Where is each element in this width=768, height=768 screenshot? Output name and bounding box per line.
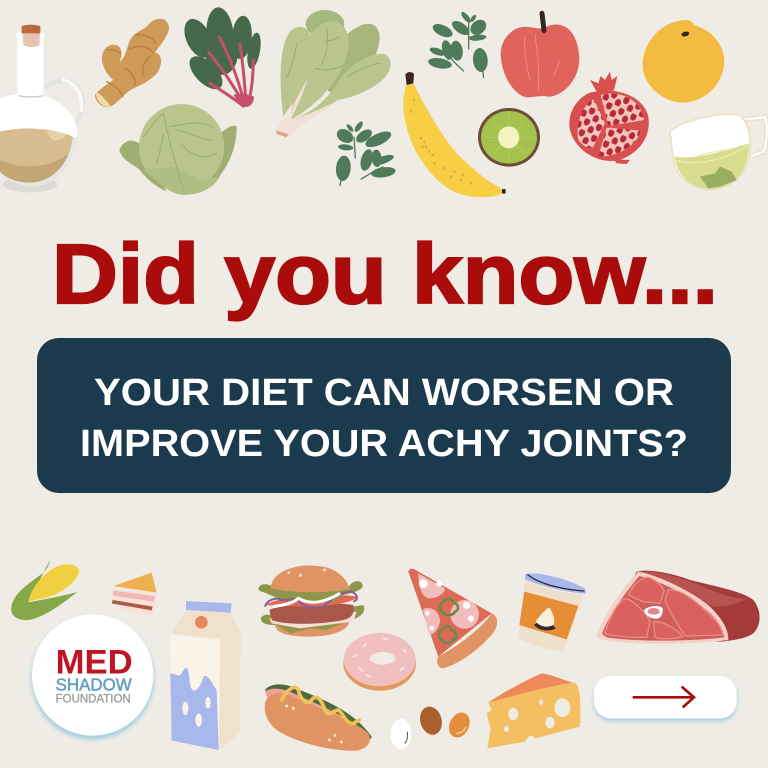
- icon: banana: [403, 72, 506, 197]
- icon: rainbow chard: [179, 6, 263, 107]
- icon: small green leaves: [334, 120, 396, 186]
- top row fruits, right: [403, 11, 767, 197]
- icon: red apple: [501, 13, 579, 97]
- logo text FOUNDATION: FOUNDATION: [56, 692, 131, 706]
- callout text: YOUR DIET CAN WORSEN OR: [94, 372, 674, 414]
- callout text: IMPROVE YOUR ACHY JOINTS?: [80, 423, 688, 465]
- icon: herbal tea cup: [670, 114, 767, 189]
- icon: herb sprig: [427, 11, 489, 78]
- icon: hot dog: [265, 684, 372, 751]
- icon: pizza slice: [408, 569, 497, 668]
- icon: coffee cup: [518, 573, 586, 652]
- logo badge: [31, 614, 154, 740]
- icon: orange: [643, 20, 724, 103]
- bottom row foods, right: [391, 569, 760, 749]
- callout panel: [37, 338, 731, 493]
- icon: ham steak: [597, 571, 760, 644]
- callout text: [80, 372, 688, 465]
- icon: cabbage: [119, 104, 237, 195]
- bottom row foods, left: [11, 560, 416, 751]
- icon: cheese wedge: [487, 673, 580, 748]
- title: Did you know...: [52, 227, 718, 321]
- icon: cake slice: [112, 573, 157, 615]
- icon: donut: [343, 633, 416, 691]
- icon: ginger root: [95, 19, 169, 107]
- icon: egg: [391, 719, 411, 749]
- icon: arrow: [633, 687, 694, 707]
- next arrow button: [594, 676, 737, 721]
- icon: burger: [258, 565, 364, 637]
- icon: milk carton: [170, 601, 241, 750]
- icon: corn: [11, 560, 79, 620]
- logo text MED: MED: [56, 643, 133, 681]
- icon: romaine lettuce: [276, 10, 391, 137]
- logo text SHADOW: SHADOW: [56, 674, 132, 694]
- icon: olive oil bottle: [0, 25, 83, 192]
- top row healthy foods, left: [0, 6, 396, 195]
- icon: kiwi slice: [478, 108, 540, 167]
- icon: pomegranate: [569, 72, 649, 164]
- icon: almonds: [417, 704, 474, 741]
